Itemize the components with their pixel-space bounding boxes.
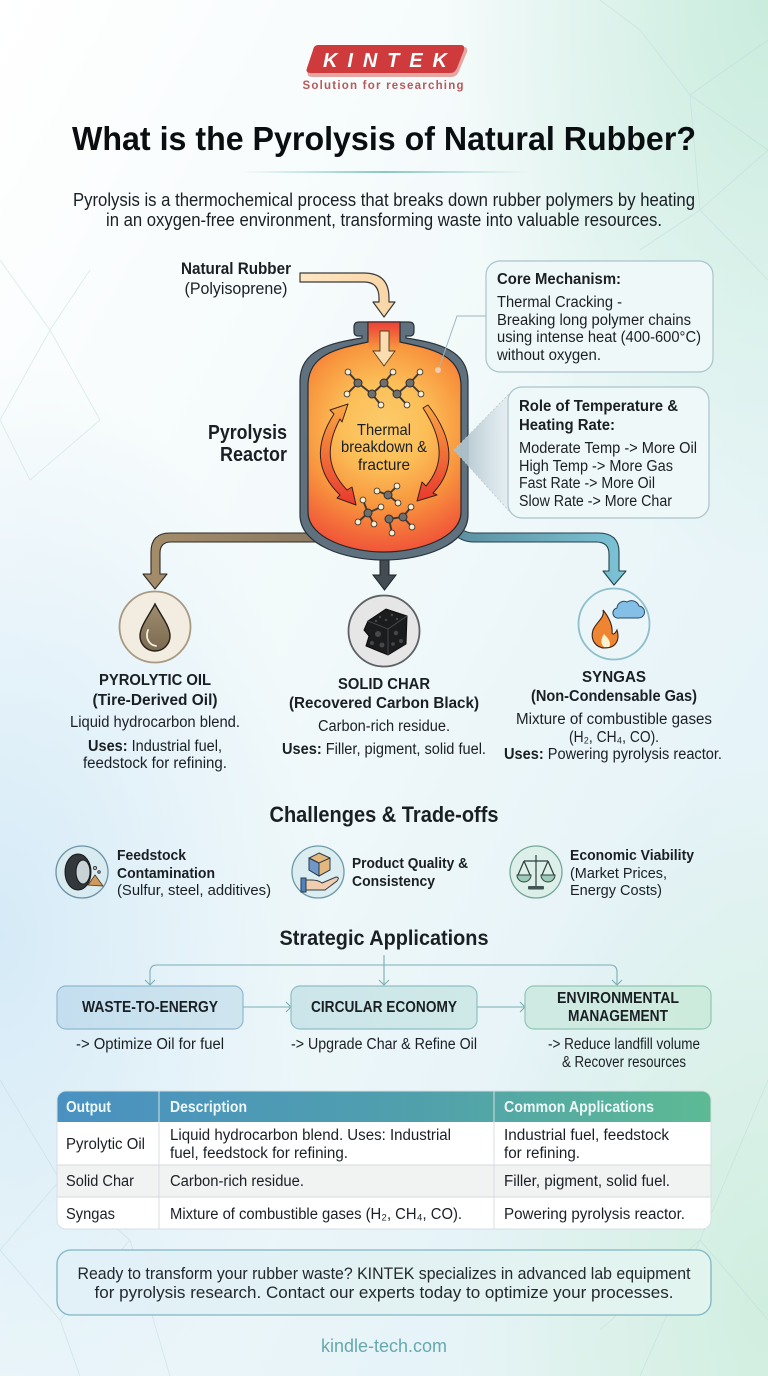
product quality text <box>352 855 468 890</box>
card: circular economy: CIRCULAR ECONOMY <box>311 999 458 1016</box>
molecule fragments <box>355 483 415 536</box>
application notes <box>76 1036 700 1071</box>
intro text: in an oxygen-free environment, transforming waste into valuable resources. <box>106 210 662 230</box>
card: waste to energy <box>57 986 243 1029</box>
feed label: natural rubber <box>181 260 292 298</box>
reactor centre label: fracture <box>358 457 410 474</box>
challenge: feedstock contamination <box>56 846 271 899</box>
reactor neck glow <box>369 323 399 351</box>
reactor <box>300 322 468 560</box>
callout body: using intense heat (400-600°C) <box>497 329 701 346</box>
product quality text: Product Quality & <box>352 855 468 872</box>
arrow: inlet inside reactor <box>373 331 395 366</box>
arrow: feed into reactor <box>300 273 395 317</box>
call to action: for pyrolysis research. Contact our experts today to optimize your processes. <box>94 1284 673 1302</box>
leader line: core mechanism <box>435 316 486 373</box>
callout body: High Temp -> More Gas <box>519 458 673 475</box>
table rows text: for refining. <box>504 1145 580 1162</box>
table rows text: fuel, feedstock for refining. <box>170 1145 348 1162</box>
economic viability text <box>570 847 695 899</box>
comparison table <box>57 1091 711 1229</box>
logo: KINTEK <box>302 45 467 92</box>
table rows text: Powering pyrolysis reactor. <box>504 1206 685 1223</box>
syngas heading <box>531 669 697 705</box>
card: environmental management: MANAGEMENT <box>568 1008 668 1025</box>
syngas heading: SYNGAS <box>582 669 646 686</box>
icon: oil drop <box>120 592 190 662</box>
syngas heading: (Non-Condensable Gas) <box>531 688 697 705</box>
icon: flame and cloud <box>578 588 650 660</box>
table header text <box>66 1099 654 1116</box>
table border <box>57 1091 711 1229</box>
icon: scales <box>510 846 562 898</box>
table rows text: Solid Char <box>66 1173 134 1190</box>
callout: temperature and heating rate <box>508 387 709 518</box>
feedstock text: Contamination <box>117 865 215 882</box>
table header text: Output <box>66 1099 111 1116</box>
economic viability text: (Market Prices, <box>570 865 667 882</box>
feed label: natural rubber: Natural Rubber <box>181 260 292 278</box>
callout heading <box>519 398 678 434</box>
table rows text: Carbon-rich residue. <box>170 1173 304 1190</box>
feedstock text: (Sulfur, steel, additives) <box>117 882 271 899</box>
application notes: -> Optimize Oil for fuel <box>76 1036 224 1053</box>
arrow: right cycle <box>417 405 449 501</box>
icon: tire <box>56 846 108 898</box>
title underline <box>240 171 530 173</box>
pipe: oil outlet <box>143 533 318 589</box>
char body: Uses: Filler, pigment, solid fuel. <box>282 741 486 758</box>
icon: hand with cube <box>292 846 344 898</box>
feedstock text: Feedstock <box>117 847 187 864</box>
syngas body: (H₂, CH₄, CO). <box>569 729 659 746</box>
logo: KINTEK: KINTEK <box>323 50 449 72</box>
title: What is the Pyrolysis of Natural Rubber? <box>72 121 696 158</box>
footer url: kindle-tech.com <box>321 1336 447 1356</box>
callout heading: Heating Rate: <box>519 417 615 434</box>
reactor centre label: breakdown & <box>341 439 427 456</box>
card: environmental management <box>525 986 711 1029</box>
char heading: SOLID CHAR <box>338 676 430 693</box>
callout body: Fast Rate -> More Oil <box>519 475 655 492</box>
intro text: Pyrolysis is a thermochemical process that breaks down rubber polymers by heating <box>73 190 695 210</box>
oil body: Uses: Industrial fuel, <box>88 738 222 755</box>
callout body <box>496 294 701 364</box>
feed label: natural rubber: (Polyisoprene) <box>184 280 288 298</box>
output: pyrolytic oil <box>70 592 240 772</box>
oil body: feedstock for refining. <box>83 755 227 772</box>
output: syngas <box>504 588 722 763</box>
table rows text: Mixture of combustible gases (H₂, CH₄, CO). <box>170 1206 462 1223</box>
callout body: Moderate Temp -> More Oil <box>519 440 697 457</box>
reactor centre label: Thermal <box>357 422 411 439</box>
oil heading: PYROLYTIC OIL <box>99 672 211 689</box>
application notes: & Recover resources <box>562 1054 686 1071</box>
char body <box>282 718 486 758</box>
card: environmental management: ENVIRONMENTAL <box>557 990 679 1007</box>
table body <box>57 1091 711 1229</box>
table rows text: Liquid hydrocarbon blend. Uses: Industrial <box>170 1127 451 1144</box>
arrow: char outlet <box>373 558 396 590</box>
call to action: Ready to transform your rubber waste? KINTEK specializes in advanced lab equipment <box>78 1265 691 1283</box>
syngas body <box>504 711 722 763</box>
oil body: Liquid hydrocarbon blend. <box>70 714 240 731</box>
arrow: left cycle <box>320 404 356 505</box>
reactor label: Pyrolysis <box>208 421 287 444</box>
syngas body: Mixture of combustible gases <box>516 711 712 728</box>
logo: KINTEK: Solution for researching <box>302 80 464 92</box>
card: circular economy <box>291 986 477 1029</box>
char body: Carbon-rich residue. <box>318 718 450 735</box>
char heading <box>289 676 479 712</box>
pipe: syngas outlet <box>454 528 626 585</box>
callout wedge <box>454 393 510 512</box>
char heading: (Recovered Carbon Black) <box>289 695 479 712</box>
intro text <box>73 190 695 230</box>
application notes: -> Upgrade Char & Refine Oil <box>291 1036 477 1053</box>
feedstock text <box>117 847 271 899</box>
application notes: -> Reduce landfill volume <box>548 1036 700 1053</box>
callout body: Slow Rate -> More Char <box>519 493 672 510</box>
table rows text: Industrial fuel, feedstock <box>504 1127 669 1144</box>
reactor label: Reactor <box>220 443 287 466</box>
product quality text: Consistency <box>352 873 436 890</box>
reactor heated interior <box>308 322 461 552</box>
molecule chain <box>344 369 424 408</box>
heading: challenges: Challenges & Trade-offs <box>270 802 498 827</box>
callout body <box>519 440 697 510</box>
economic viability text: Economic Viability <box>570 847 695 864</box>
callout body: Thermal Cracking - <box>497 294 622 311</box>
oil body <box>70 714 240 772</box>
callout heading: Role of Temperature & <box>519 398 678 415</box>
challenge: product quality <box>292 846 468 898</box>
call to action <box>57 1250 711 1315</box>
card: waste to energy: WASTE-TO-ENERGY <box>82 999 219 1016</box>
oil heading <box>92 672 218 709</box>
icon: char block <box>348 596 420 666</box>
callout body: without oxygen. <box>496 347 601 364</box>
oil heading: (Tire-Derived Oil) <box>92 692 218 709</box>
table header text: Common Applications <box>504 1099 654 1116</box>
output: solid char <box>282 596 486 758</box>
callout: core mechanism <box>486 261 713 372</box>
table header text: Description <box>170 1099 247 1116</box>
reactor label <box>208 421 287 466</box>
reactor centre label <box>341 422 427 474</box>
syngas body: Uses: Powering pyrolysis reactor. <box>504 746 722 763</box>
table rows text: Syngas <box>66 1206 115 1223</box>
heading: strategic applications: Strategic Applications <box>280 926 489 950</box>
table rows text: Pyrolytic Oil <box>66 1136 145 1153</box>
reactor vessel shell <box>300 322 468 560</box>
table rows text <box>66 1127 685 1223</box>
callout body: Breaking long polymer chains <box>497 312 691 329</box>
economic viability text: Energy Costs) <box>570 882 662 899</box>
connector arrows <box>145 955 622 1012</box>
table rows text: Filler, pigment, solid fuel. <box>504 1173 670 1190</box>
callout heading: Core Mechanism: <box>497 271 621 288</box>
challenge: economic viability <box>510 846 695 899</box>
